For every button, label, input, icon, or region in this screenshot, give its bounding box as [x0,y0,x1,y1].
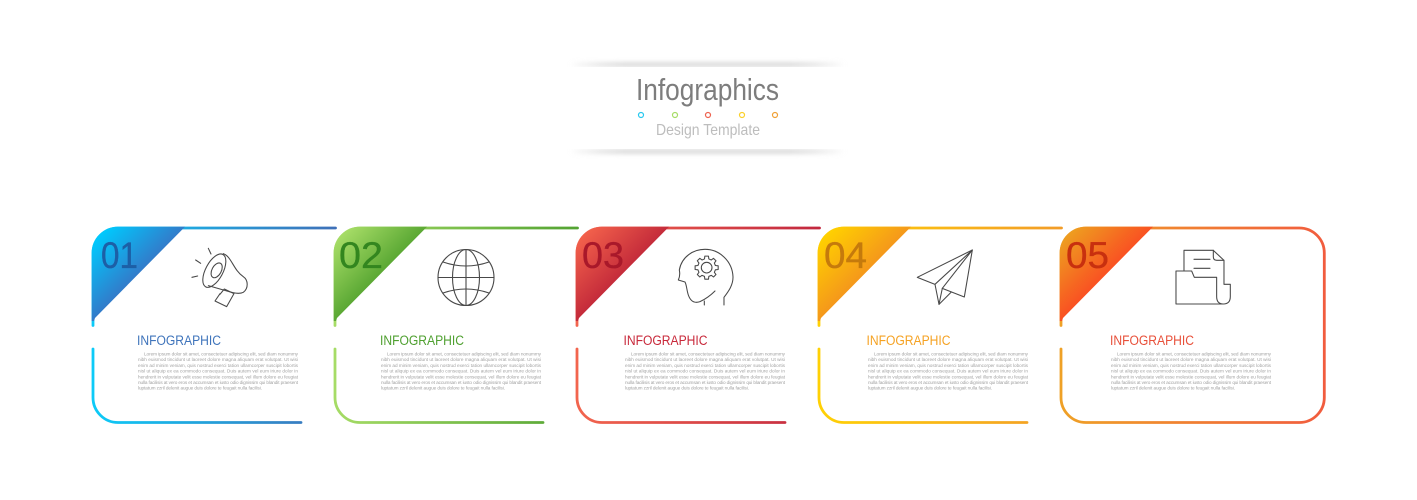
five coloured dots [638,112,778,118]
corner tab 02 [334,227,427,321]
body text 04: hendrerit in vulputate velit esse molestie consequat, vel illum dolore eu feugiat [868,374,1029,379]
body text 01 [138,352,299,391]
card outline 03 [577,228,820,422]
body text 02: Lorem ipsum dolor sit amet, consectetuer adipiscing elit, sed diam nonummy [387,352,542,356]
body text 03 [625,352,786,391]
body text 04: enim ad minim veniam, quis nostrud exerci tation ullamcorper suscipit lobortis [868,363,1029,368]
corner tab 05 [1060,227,1153,321]
body text 05: Lorem ipsum dolor sit amet, consectetuer adipiscing elit, sed diam nonummy [1117,352,1272,356]
card outline 02 [335,228,578,422]
body text 02: hendrerit in vulputate velit esse molestie consequat, vel illum dolore eu feugiat [381,374,542,379]
body text 02: luptatum zzril delenit augue duis dolore te feugait nulla facilisi. [381,386,505,391]
body text 01: Lorem ipsum dolor sit amet, consectetuer adipiscing elit, sed diam nonummy [144,352,299,356]
body text 04: nibh euismod tincidunt ut laoreet dolore magna aliquam erat volutpat. Ut wisi [868,357,1028,362]
card outline 01 [93,228,335,422]
body text 04 [868,352,1029,391]
number 05: 05 [1066,235,1109,276]
body text 05 [1111,352,1272,391]
corner tab 03 [576,227,669,321]
heading 01: INFOGRAPHIC [137,333,221,349]
body text 01: nibh euismod tincidunt ut laoreet dolore magna aliquam erat volutpat. Ut wisi [138,357,298,362]
heading 04: INFOGRAPHIC [866,333,950,349]
icon: folder with document [1176,250,1230,304]
panel: step 05 [1060,227,1324,422]
corner tab 04 [818,227,911,321]
body text 04: luptatum zzril delenit augue duis dolore te feugait nulla facilisi. [868,386,992,391]
body text 02 [381,352,542,391]
card outline 04 [819,228,1062,422]
body text 03: nisl ut aliquip ex ea commodo consequat. Duis autem vel eum iriure dolor in [625,369,785,374]
panel: step 02 [334,227,578,422]
body text 05: hendrerit in vulputate velit esse molestie consequat, vel illum dolore eu feugiat [1111,374,1272,379]
body text 03: nulla facilisis at vero eros et accumsan et iusto odio dignissim qui blandit praesent [625,380,786,385]
body text 04: Lorem ipsum dolor sit amet, consectetuer adipiscing elit, sed diam nonummy [874,352,1029,356]
body text 01: hendrerit in vulputate velit esse molestie consequat, vel illum dolore eu feugiat [138,374,299,379]
body text 01: enim ad minim veniam, quis nostrud exerci tation ullamcorper suscipit lobortis [138,363,299,368]
body text 05: nibh euismod tincidunt ut laoreet dolore magna aliquam erat volutpat. Ut wisi [1111,357,1271,362]
body text 03: luptatum zzril delenit augue duis dolore te feugait nulla facilisi. [625,386,749,391]
icon: globe [438,250,494,306]
heading 05: INFOGRAPHIC [1110,333,1194,349]
body text 05: nisl ut aliquip ex ea commodo consequat. Duis autem vel eum iriure dolor in [1111,369,1271,374]
heading: Infographics: Infographics [636,72,779,107]
number 02: 02 [339,235,383,276]
title block [540,62,880,154]
body text 05: enim ad minim veniam, quis nostrud exerci tation ullamcorper suscipit lobortis [1111,363,1272,368]
number 03: 03 [582,235,624,276]
body text 03: enim ad minim veniam, quis nostrud exerci tation ullamcorper suscipit lobortis [625,363,786,368]
body text 02: nulla facilisis at vero eros et accumsan et iusto odio dignissim qui blandit praesent [381,380,542,385]
heading 02: INFOGRAPHIC [380,333,464,349]
body text 04: nulla facilisis at vero eros et accumsan et iusto odio dignissim qui blandit praesent [868,380,1029,385]
body text 02: nibh euismod tincidunt ut laoreet dolore magna aliquam erat volutpat. Ut wisi [381,357,541,362]
card outline 05 [1061,228,1324,422]
body text 01: nulla facilisis at vero eros et accumsan et iusto odio dignissim qui blandit praesent [138,380,299,385]
subheading: Design Template: Design Template [656,122,760,139]
number 01: 01 [101,235,138,276]
panel: step 01 [92,227,336,422]
corner tab 01 [92,227,185,321]
panel: step 03 [576,227,820,422]
body text 02: enim ad minim veniam, quis nostrud exerci tation ullamcorper suscipit lobortis [381,363,542,368]
body text 03: nibh euismod tincidunt ut laoreet dolore magna aliquam erat volutpat. Ut wisi [625,357,785,362]
panel: step 04 [818,227,1062,422]
body text 02: nisl ut aliquip ex ea commodo consequat. Duis autem vel eum iriure dolor in [381,369,541,374]
icon: head with gear [678,249,733,305]
icon: paper plane [917,250,972,304]
body text 03: Lorem ipsum dolor sit amet, consectetuer adipiscing elit, sed diam nonummy [631,352,786,356]
body text 01: nisl ut aliquip ex ea commodo consequat. Duis autem vel eum iriure dolor in [138,369,298,374]
body text 03: hendrerit in vulputate velit esse molestie consequat, vel illum dolore eu feugiat [625,374,786,379]
number 04: 04 [824,235,867,276]
icon: megaphone [192,248,247,307]
body text 05: luptatum zzril delenit augue duis dolore te feugait nulla facilisi. [1111,386,1235,391]
body text 05: nulla facilisis at vero eros et accumsan et iusto odio dignissim qui blandit praesent [1111,380,1272,385]
heading 03: INFOGRAPHIC [624,333,708,349]
body text 01: luptatum zzril delenit augue duis dolore te feugait nulla facilisi. [138,386,262,391]
body text 04: nisl ut aliquip ex ea commodo consequat. Duis autem vel eum iriure dolor in [868,369,1028,374]
